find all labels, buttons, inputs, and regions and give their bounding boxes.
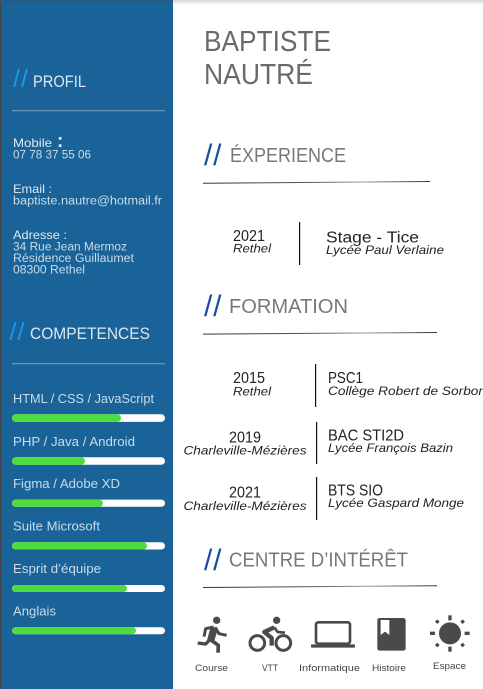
skill: php java android: PHP / Java / Android xyxy=(13,435,135,449)
heading: centre d'interet: // xyxy=(204,544,222,577)
entry: stage tice xyxy=(233,222,444,265)
entry: bts sio: Lycée Gaspard Monge xyxy=(328,496,464,510)
title: name: BAPTISTE xyxy=(204,26,331,58)
heading: formation: // xyxy=(204,290,222,323)
entry: stage tice: Rethel xyxy=(233,242,271,256)
icon: laptop xyxy=(311,622,355,648)
entry: bac sti2d: 2019 xyxy=(229,430,261,447)
skill: suite microsoft xyxy=(12,520,165,550)
skill: anglais xyxy=(12,605,165,634)
entry: stage tice: Stage - Tice xyxy=(326,230,419,246)
icon: runner xyxy=(198,617,227,653)
entry: bac sti2d: Charleville-Mézières xyxy=(184,443,306,457)
skill: html css javascript: HTML / CSS / JavaScript xyxy=(13,392,155,406)
heading: competences: COMPETENCES xyxy=(30,325,150,343)
text block: contact details: Mobile xyxy=(13,136,52,150)
skill: esprit d'equipe: Esprit d’équipe xyxy=(13,562,101,576)
label: informatique: Informatique xyxy=(299,663,360,674)
text block: contact details: 08300 Rethel xyxy=(13,264,85,276)
entry: psc1: Collège Robert de Sorbon xyxy=(328,384,483,398)
heading: experience: ÉXPERIENCE xyxy=(230,144,346,167)
icon: sun xyxy=(430,615,470,652)
text block: contact details: Email : xyxy=(13,182,52,196)
label: course: Course xyxy=(195,663,228,674)
title: name: NAUTRÉ xyxy=(204,58,313,91)
entry: stage tice: 2021 xyxy=(233,228,265,245)
text block: contact details: : xyxy=(57,131,63,152)
text block: contact details: 07 78 37 55 06 xyxy=(13,150,91,162)
entry: bac sti2d: BAC STI2D xyxy=(328,428,404,445)
heading: experience xyxy=(203,139,430,184)
skill: html css javascript xyxy=(12,392,165,422)
skill: esprit d'equipe xyxy=(12,562,165,592)
icon: bicycle xyxy=(250,617,291,650)
text block: contact details: baptiste.nautre@hotmail.fr xyxy=(13,196,162,208)
heading: competences xyxy=(10,318,165,364)
heading: profil: PROFIL xyxy=(33,73,86,91)
heading: formation: FORMATION xyxy=(229,296,348,318)
text block: contact details: Adresse : xyxy=(13,228,67,242)
entry: bts sio: 2021 xyxy=(229,485,261,502)
heading: experience: // xyxy=(204,139,222,172)
entry: psc1 xyxy=(233,364,483,407)
entry: bts sio: Charleville-Mézières xyxy=(184,499,306,513)
entry: bac sti2d xyxy=(184,422,453,464)
entry: bac sti2d: Lycée François Bazin xyxy=(328,441,453,455)
title: name xyxy=(204,26,331,91)
skill: figma adobe xd: Figma / Adobe XD xyxy=(13,477,120,491)
entry: psc1: PSC1 xyxy=(328,370,363,387)
heading: formation xyxy=(203,290,437,335)
heading: centre d'interet: CENTRE D’INTÉRÊT xyxy=(229,549,408,572)
skill: suite microsoft: Suite Microsoft xyxy=(13,520,101,534)
heading: centre d'interet xyxy=(203,544,437,588)
icon: book xyxy=(377,618,406,651)
label: espace: Espace xyxy=(433,661,466,672)
entry: bts sio: BTS SIO xyxy=(328,483,383,500)
skill: figma adobe xd xyxy=(12,477,165,507)
text block: contact details: 34 Rue Jean Mermoz xyxy=(13,242,127,254)
skill: anglais: Anglais xyxy=(13,605,56,619)
skill: php java android xyxy=(12,435,165,465)
entry: bts sio xyxy=(184,477,464,520)
entry: psc1: 2015 xyxy=(233,370,265,387)
entry: psc1: Rethel xyxy=(233,384,271,398)
text block: contact details: Résidence Guillaumet xyxy=(13,253,135,265)
heading: profil xyxy=(12,65,165,111)
label: histoire: Histoire xyxy=(372,663,406,674)
text block: contact details xyxy=(13,131,162,276)
entry: stage tice: Lycée Paul Verlaine xyxy=(326,243,444,257)
label: vtt: VTT xyxy=(262,663,278,674)
panel: sidebar xyxy=(0,0,173,689)
heading: profil: // xyxy=(13,65,28,93)
heading: competences: // xyxy=(10,318,25,346)
